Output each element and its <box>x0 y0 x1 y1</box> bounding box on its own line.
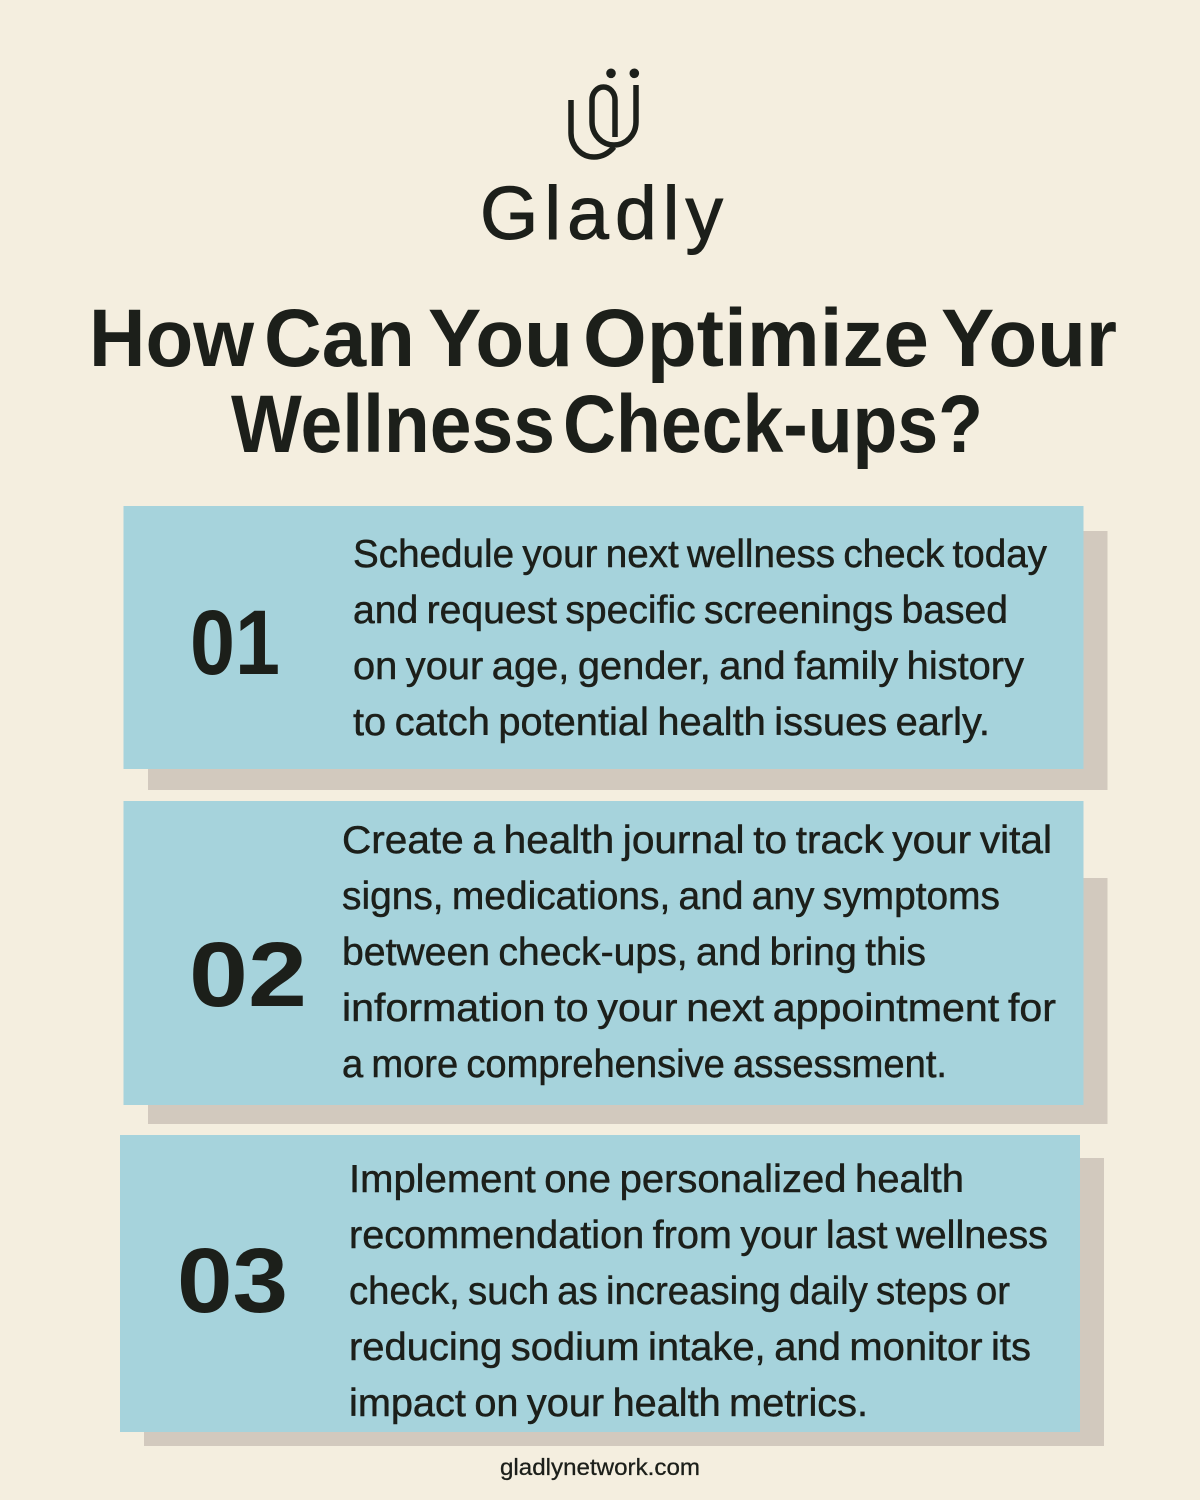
panel background <box>124 801 1084 1105</box>
title: How <box>89 293 254 384</box>
panel: step 02 <box>124 801 1108 1124</box>
text block: Schedule your next wellness check today <box>353 533 1047 576</box>
title: Wellness <box>231 379 555 470</box>
text block: signs, medications, and any symptoms <box>342 875 1000 918</box>
text block: a more comprehensive assessment. <box>342 1043 947 1086</box>
panel shadow <box>144 1158 1104 1446</box>
title: You <box>428 293 573 384</box>
number 03: 03 <box>177 1230 288 1332</box>
panel background <box>124 506 1084 769</box>
panel: step 03 <box>120 1135 1104 1446</box>
text block: Implement one personalized health <box>349 1158 964 1201</box>
panel: step 01 <box>124 506 1108 790</box>
footer url: gladlynetwork.com <box>500 1454 700 1480</box>
text block: reducing sodium intake, and monitor its <box>349 1326 1031 1369</box>
text block: Create a health journal to track your vital <box>342 819 1052 862</box>
text block <box>349 1158 1048 1425</box>
text block: and request specific screenings based <box>353 589 1008 632</box>
logo: Gladly <box>480 68 724 255</box>
text block <box>353 533 1047 744</box>
text block: check, such as increasing daily steps or <box>349 1270 1010 1313</box>
title: Check-ups? <box>563 379 983 470</box>
text block: impact on your health metrics. <box>349 1382 868 1425</box>
title <box>89 293 1117 470</box>
panel background <box>120 1135 1080 1432</box>
title: Your <box>941 293 1117 384</box>
title: Can <box>264 293 415 384</box>
text block: information to your next appointment for <box>342 987 1056 1030</box>
icon: paperclip smile <box>571 68 639 157</box>
text block: on your age, gender, and family history <box>353 645 1024 688</box>
text block <box>342 819 1056 1086</box>
title: Optimize <box>583 293 929 384</box>
number 02: 02 <box>189 924 307 1026</box>
text block: to catch potential health issues early. <box>353 701 990 744</box>
text block: between check-ups, and bring this <box>342 931 926 974</box>
wordmark: Gladly <box>480 171 724 255</box>
number 01: 01 <box>190 592 280 694</box>
text block: recommendation from your last wellness <box>349 1214 1048 1257</box>
panel shadow <box>148 878 1108 1124</box>
panel shadow <box>148 531 1108 790</box>
